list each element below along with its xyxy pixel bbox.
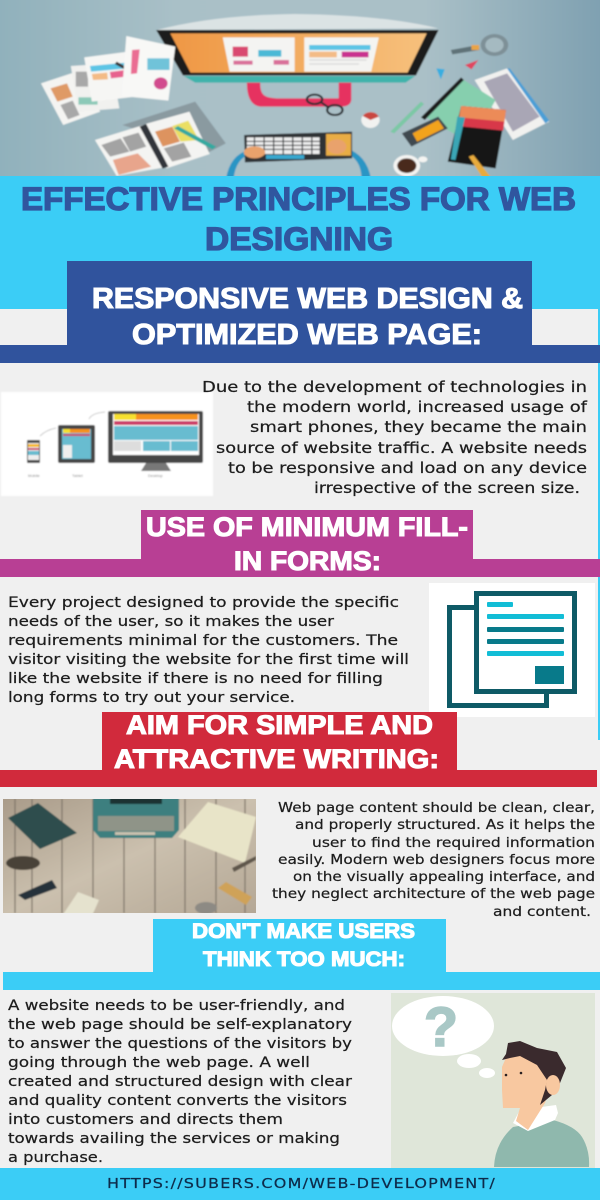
text: simple and attractive writing: they neglect architecture of the web page: [272, 887, 595, 902]
text: responsive web design: to be responsive and load on any device: [228, 459, 587, 477]
image: typewriter on wooden desk: [0, 796, 260, 916]
text: simple and attractive writing: Web page content should be clean, clear,: [278, 801, 595, 816]
image: responsive devices: Tablet: [72, 473, 84, 478]
text: responsive web design: Due to the development of technologies in: [202, 378, 587, 396]
section 3: simple and attractive writing: [0, 710, 597, 920]
heading banner: minimum fill-in forms: USE OF MINIMUM FILL-: [146, 512, 468, 542]
text: simple and attractive writing: [272, 801, 595, 920]
text: simple and attractive writing: user to find the required information: [312, 836, 595, 851]
text: responsive web design: source of website traffic. A website needs: [216, 439, 587, 457]
text: don't make users think: going through the web page. A well: [8, 1055, 310, 1071]
heading banner: simple and attractive writing: AIM FOR SIMPLE AND: [126, 710, 433, 740]
image: thinking man: [391, 993, 595, 1168]
title: EFFECTIVE PRINCIPLES FOR WEB: [21, 181, 576, 217]
decorative right edge: [598, 309, 600, 740]
text: don't make users think: A website needs to be user-friendly, and: [8, 998, 345, 1014]
text: don't make users think: into customers and directs them: [8, 1112, 283, 1128]
heading banner: simple and attractive writing: ATTRACTIVE WRITING:: [114, 744, 439, 774]
title: [21, 181, 576, 257]
text: don't make users think: and quality content converts the visitors: [8, 1093, 347, 1109]
icon: coffee cup: [393, 155, 427, 176]
text: minimum fill-in forms: needs of the user, so it makes the user: [8, 614, 334, 630]
section 2: minimum fill-in forms: [0, 510, 600, 717]
text: don't make users think: to answer the questions of the visitors by: [8, 1036, 352, 1052]
image: responsive devices: Mobile: [28, 473, 41, 478]
text: simple and attractive writing: easily. Modern web designers focus more: [278, 853, 595, 868]
heading banner: responsive web design: [0, 261, 600, 363]
icon: notebooks and phone: [390, 68, 549, 178]
text: minimum fill-in forms: like the website if there is no need for filling: [8, 671, 383, 687]
text: responsive web design: irrespective of the screen size.: [314, 479, 580, 497]
image: responsive devices: [1, 392, 213, 496]
text: minimum fill-in forms: Every project designed to provide the specific: [8, 595, 399, 611]
heading banner: responsive web design: OPTIMIZED WEB PAGE:: [132, 319, 482, 351]
image: thinking man: ?: [424, 995, 458, 1058]
text: minimum fill-in forms: [8, 595, 409, 706]
heading banner: responsive web design: RESPONSIVE WEB DESIGN &: [92, 283, 523, 315]
heading banner: don't make users think: THINK TOO MUCH:: [203, 948, 405, 971]
heading banner: don't make users think: DON'T MAKE USERS: [192, 920, 415, 943]
section 1: responsive web design: [0, 261, 600, 497]
image: responsive devices: Desktop: [148, 473, 163, 478]
icon: printed documents: [41, 36, 175, 125]
icon: keyboard and hands: [226, 132, 371, 180]
heading banner: minimum fill-in forms: IN FORMS:: [234, 546, 381, 576]
text: simple and attractive writing: and properly structured. As it helps the: [295, 818, 595, 833]
title: DESIGNING: [205, 221, 393, 257]
title band: [0, 176, 600, 309]
icon: desktop monitor: [156, 14, 439, 107]
heading banner: don't make users think: [3, 919, 600, 990]
icon: documents: [429, 583, 595, 717]
text: don't make users think: towards availing the services or making: [8, 1131, 340, 1147]
text: don't make users think: a purchase.: [8, 1150, 103, 1166]
footer: website link: [0, 1168, 600, 1200]
text: don't make users think: [8, 998, 352, 1166]
text: don't make users think: created and structured design with clear: [8, 1074, 352, 1090]
text: responsive web design: the modern world, increased usage of: [247, 398, 588, 416]
text: responsive web design: [202, 378, 588, 497]
text: minimum fill-in forms: visitor visiting the website for the first time will: [8, 652, 409, 668]
text: simple and attractive writing: and content.: [493, 905, 591, 920]
icon: open planner: [95, 102, 226, 176]
icon: push pins and pie: [361, 60, 478, 128]
heading banner: minimum fill-in forms: [0, 510, 600, 577]
text: simple and attractive writing: on the visually appealing interface, and: [293, 870, 595, 885]
section 4: don't make users think: [3, 919, 600, 1168]
icon: glasses: [307, 95, 343, 115]
footer: website link: HTTPS://SUBERS.COM/WEB-DEVELOPMENT/: [107, 1176, 496, 1192]
text: minimum fill-in forms: long forms to try out your service.: [8, 690, 295, 706]
text: responsive web design: smart phones, they became the main: [250, 418, 587, 436]
text: minimum fill-in forms: requirements minimal for the customers. The: [8, 633, 398, 649]
header illustration: designer desk: [0, 0, 600, 183]
text: don't make users think: the web page should be self-explanatory: [8, 1017, 352, 1033]
icon: magnifying glass: [451, 34, 508, 56]
heading banner: simple and attractive writing: [0, 710, 597, 787]
